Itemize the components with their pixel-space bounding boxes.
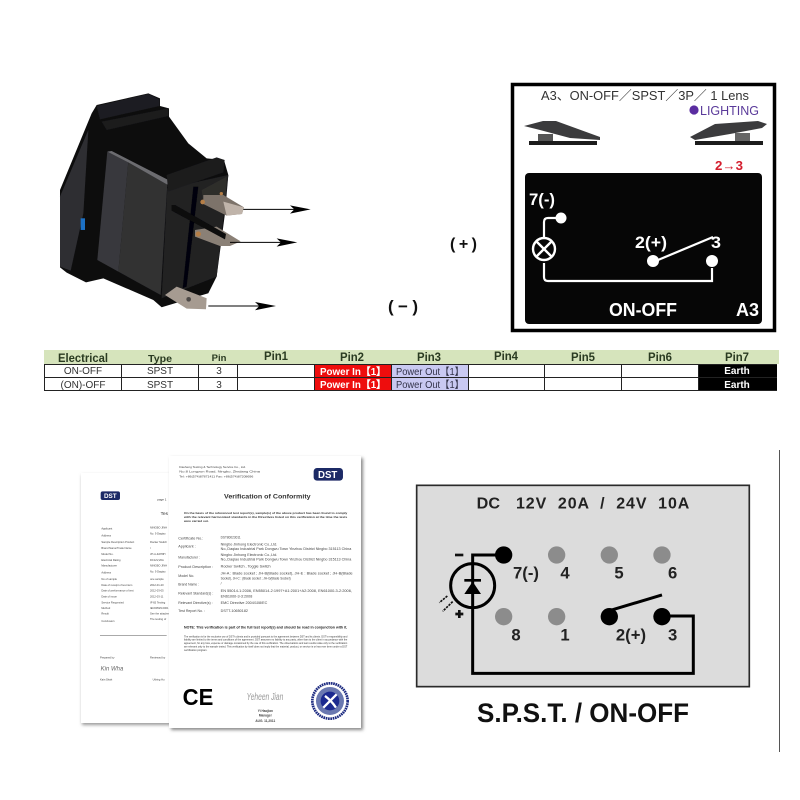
certificate: test report (back page): Method — [101, 606, 111, 610]
certificate: test report (back page): Rocker Switch — [150, 540, 167, 544]
certificate fields — [178, 536, 353, 598]
header row: Pin4 — [494, 349, 518, 363]
label: negative terminal: (−) — [388, 297, 418, 316]
certificate fields: Ningbo Jinhong Electronic Co.,Ltd. — [221, 553, 277, 557]
wiring diagram panel — [525, 173, 762, 324]
intro paragraph — [183, 511, 348, 523]
fine print: The verification is for the exclusive use of DST's clients and is provided pursuant to the agreement between DST and its clients. DST's responsibility and — [184, 636, 348, 639]
row: (ON)-OFF: Power Out【1】 — [396, 379, 464, 391]
lamp symbol — [533, 238, 555, 260]
certificate: test report (back page): Conclusion — [101, 619, 115, 623]
DST logo — [314, 468, 343, 481]
intro paragraph: were carried out. — [183, 519, 209, 523]
certificate: test report (back page): Electrical Rating — [101, 558, 121, 562]
certificate: test report (back page): No. 9 Daqiao — [150, 532, 166, 536]
certificate: test report (back page): IEC60529:2001 — [150, 606, 169, 610]
circuit wiring — [473, 555, 693, 673]
row: (ON)-OFF: SPST — [147, 380, 173, 391]
certificate: test report (back page): Date of performance of test — [101, 589, 134, 593]
signatory — [255, 709, 275, 723]
directive fields: Relevant Directive(s) : — [178, 601, 213, 605]
certificate fields: Ningbo Jinhong Electronic Co.,Ltd. — [221, 542, 277, 546]
pin label 7(-): 7(-) — [529, 190, 555, 209]
header row: Electrical — [58, 351, 108, 365]
certificate: test report (back page): Model No. — [101, 552, 114, 556]
table: pin assignment — [44, 349, 779, 391]
certificate fields: JH-A : Blade socket ; JH-B(Blade socket), JH-E : Blade socket ; JH-B(Blade — [221, 572, 353, 576]
pin label 2(+): 2(+) — [635, 233, 667, 252]
signatory: Yi Haojian — [258, 709, 273, 713]
certificate: test report (back page): 2012-03-11 — [150, 595, 164, 599]
certificate: test report (back page): Brand Name/Trade Name — [101, 546, 132, 550]
circuit wires — [544, 218, 713, 281]
issuer address: Dasheng Testing & Technology Service Co., Ltd. — [179, 465, 246, 469]
terminal numbers: 2(+) — [616, 625, 646, 644]
certificate: test report (back page): Manufacturer — [101, 563, 117, 567]
seal — [312, 683, 348, 719]
signatory: AUG. 11,2011 — [255, 719, 275, 723]
certificate fields: Applicant : — [178, 545, 196, 549]
certificate: test report (back page): NINGBO JINH — [150, 563, 167, 567]
certificate: test report (back page): Prepared by — [100, 656, 115, 660]
header row: Pin7 — [725, 350, 749, 364]
terminal numbers: 3 — [668, 625, 677, 644]
certificate: test report (back page): Date of receipt of test item — [101, 583, 133, 587]
fine print: are relevant only to the sample tested. This verification by itself does not imply that the material, product, or service is or has ever been under a DST — [184, 646, 348, 649]
unused terminals — [495, 546, 671, 625]
certificate fields: Certificate No.: — [178, 536, 203, 540]
certificate fields: No.,Daqiao Industrial Park Dongwu Town Yinzhou District Ningbo 315113 China — [221, 547, 351, 551]
certificate: test report (back page): NINGBO JINH — [150, 526, 167, 530]
rating heading: DC — [477, 495, 500, 512]
certificate: test report (back page): Applicant — [101, 527, 113, 531]
row: (ON)-OFF: Earth — [724, 380, 750, 391]
certificate: test report (back page): Tes — [161, 511, 169, 516]
panel: terminal wiring diagram — [417, 485, 749, 687]
header row — [44, 349, 779, 365]
certificate fields: Rocker Switch , Toggle Switch — [221, 565, 271, 569]
certificate fields: DST80023011 — [221, 536, 241, 540]
issuer address: Tel: +86(574)87871411 Fax: +86(574)87208696 — [179, 475, 254, 479]
row: (ON)-OFF — [60, 378, 750, 391]
model label: A3 — [736, 300, 759, 320]
row: (ON)-OFF: (ON)-OFF — [60, 380, 106, 391]
verification note: NOTE: This verification is part of the full test report(s) and should be read in conjunction with it. — [184, 626, 347, 630]
intro paragraph: On the basis of the referenced test report(s), sample(s) of the above product has been found to comply — [184, 511, 348, 515]
terminal numbers: 8 — [511, 625, 521, 644]
row: ON-OFF: Power Out【1】 — [396, 366, 464, 378]
certificate: test report (back page): DC12V,20A — [150, 558, 164, 562]
DST logo: DST — [318, 470, 337, 481]
certificate: test report (back page): Sample Description Product — [101, 540, 135, 544]
certificate fields: Relevant Standard(s) : — [178, 592, 213, 596]
product photo: rocker switch with terminal arrows — [60, 93, 311, 310]
coloured cells — [315, 364, 777, 390]
directive fields: EMC Directive 2004/108/EC — [221, 601, 268, 605]
icon: rocker on position — [690, 121, 767, 145]
certificate fields: Model No. — [178, 574, 194, 578]
certificate: test report (back page): Kin Wha — [101, 667, 124, 673]
certificate fields: EN61000-3-3:2008 — [221, 594, 252, 598]
certificate: test report (back page): Address — [101, 533, 112, 537]
certificate: test report (back page): page 1 — [157, 498, 167, 502]
row: ON-OFF: Earth — [724, 366, 750, 377]
certificate fields: Manufacturer : — [178, 556, 200, 560]
certificate: test report (back page): / — [150, 546, 151, 550]
terminal numbers: 6 — [668, 564, 677, 583]
switch body — [60, 93, 244, 309]
active terminals — [495, 546, 671, 625]
certificate: test report (back page): See the attached — [150, 612, 171, 616]
pin label 3: 3 — [711, 233, 721, 252]
fine print: certification program. — [184, 649, 208, 652]
fine print: agreement, for any loss, expense or damage occasioned by the use of this verification. The observations and test results relate only to the verification — [184, 642, 348, 645]
terminal numbers: 1 — [560, 625, 570, 644]
certificate fields: No.,Daqiao Industrial Park Dongwu Town Yinzhou District Ningbo 315113 China — [221, 558, 351, 562]
certificate: test report (back page): one sample — [150, 577, 164, 581]
certificate: test report (back page): Uthing Hu — [153, 678, 165, 682]
certificate: test report (back page): IP 65 Testing — [150, 600, 166, 604]
certificate: test report (back page): Result — [101, 612, 109, 616]
icon: LED symbol — [439, 554, 495, 618]
signature: Yeheen Jian — [247, 692, 284, 703]
certificate: test report (back page): The testing of — [150, 617, 166, 621]
row: (ON)-OFF: Power In【1】 — [320, 378, 386, 391]
row: ON-OFF: Power In【1】 — [320, 365, 386, 378]
terminal numbers — [511, 564, 677, 644]
arrow: top terminal — [243, 205, 311, 214]
rating values: 12V 20A / 24V 10A — [516, 495, 690, 512]
certificate: test report (back page): No. 9 Daqiao — [150, 570, 166, 574]
certificate: test report (back page): 2012-01-20 — [150, 583, 164, 587]
label: positive terminal: (+) — [450, 236, 477, 253]
header row: Pin1 — [264, 349, 288, 363]
terminal dots — [556, 212, 718, 267]
arrow: middle terminal — [230, 238, 297, 247]
header row: Pin6 — [648, 350, 672, 364]
signatory: Manager — [259, 714, 273, 718]
certificate: verification of conformity (front page) — [169, 456, 363, 730]
directive fields: Test Report No. : — [178, 609, 205, 613]
certificate: test report (back page): Service Requested — [101, 600, 124, 604]
certificate: test report (back page): Reviewed by — [150, 656, 166, 660]
certificate fields: / — [221, 582, 222, 586]
row: ON-OFF — [64, 365, 750, 378]
card frame — [512, 84, 774, 330]
icon: rocker off position — [524, 121, 600, 145]
mode label: ON-OFF — [609, 300, 677, 320]
header row: Type — [148, 353, 172, 365]
heading: switch type: S.P.S.T. / ON-OFF — [477, 698, 689, 728]
header row: Pin3 — [417, 350, 441, 364]
CE mark: CE — [183, 684, 213, 710]
lighting legend: LIGHTING — [700, 103, 759, 118]
certificate: test report (back page): JH-A-ZAH8H — [150, 552, 166, 556]
certificate: test report (back page): No of sample — [101, 577, 118, 581]
fine print — [184, 636, 348, 652]
arrow: bottom terminal — [208, 302, 276, 310]
certificate fields: Socket), JH-C : (Blade socket ; JH-G(Blade Socket) — [221, 576, 291, 580]
header row: Pin — [212, 353, 227, 364]
issuer address — [179, 465, 261, 479]
row: ON-OFF: SPST — [147, 366, 173, 377]
DST logo small: DST — [104, 493, 117, 500]
certificate: test report (back page): Address — [101, 570, 112, 574]
header row: Pin5 — [571, 350, 595, 364]
card title: A3、ON-OFF／SPST／3P／ 1 Lens — [541, 88, 749, 103]
terminal numbers: 4 — [560, 564, 570, 583]
directive fields — [178, 601, 268, 613]
fine print: liability are limited to the terms and conditions of the agreement. DST assumes no liability to any party, other than to the client in accordance with the — [184, 639, 348, 642]
certificate: test report (back page): 2012-03-05 — [150, 589, 164, 593]
terminal numbers: 7(-) — [513, 564, 539, 583]
certificates — [81, 456, 363, 730]
row: ON-OFF: 3 — [216, 366, 222, 377]
certificate: test report (back page): Date of issue — [101, 595, 117, 599]
certificate fields: EN 55014-1:2006, EN55014-2:1997+A1:2001+A2:2008, EN61000-3-2:2006, — [221, 589, 352, 593]
panel background — [417, 485, 749, 687]
panel: A3 switch wiring card — [512, 84, 774, 330]
label: contact 2 to 3: 2→3 — [715, 158, 743, 173]
issuer address: No.8 Longzun Road, Ningbo, Zhejiang China — [179, 470, 261, 474]
directive fields: DSTT-10650182 — [221, 609, 248, 613]
certificate fields: Brand Name : — [178, 582, 199, 586]
row: ON-OFF: ON-OFF — [64, 366, 102, 377]
certificate: test report (back page): Kain Shah — [100, 678, 113, 682]
terminal numbers: 5 — [614, 564, 624, 583]
certificate: test report (back page) — [81, 473, 182, 725]
certificate heading: Verification of Conformity — [224, 494, 311, 501]
certificate fields: Product Description : — [178, 565, 213, 569]
row: (ON)-OFF: 3 — [216, 380, 222, 391]
intro paragraph: with the relevant harmonized standards in the Directives listed on this verification at the time the tests — [183, 515, 348, 519]
header row: Pin2 — [340, 350, 364, 364]
